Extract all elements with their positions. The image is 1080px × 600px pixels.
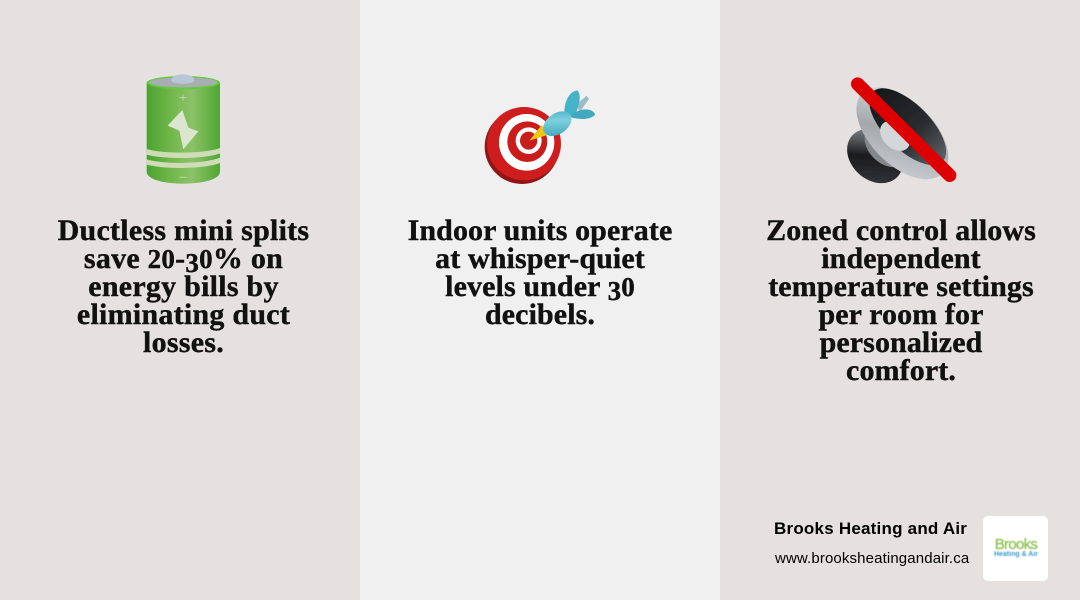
text: zoned control: independent — [821, 242, 981, 275]
text: zoned control: personalized — [820, 326, 982, 359]
text: energy savings: energy bills by — [88, 270, 279, 303]
text: energy savings: Ductless mini splits — [58, 214, 309, 247]
icon: green battery — [147, 74, 220, 184]
icon: dartboard with dart — [485, 90, 595, 184]
text: energy savings: save 20-30% on — [84, 242, 283, 278]
text: quiet operation: decibels. — [485, 298, 595, 331]
panel: quiet operation — [360, 0, 720, 600]
text: zoned control: Zoned control allows — [766, 214, 1036, 247]
website url: www.brooksheatingandair.ca — [775, 550, 969, 567]
icon: crossed-out speaker — [836, 71, 965, 196]
logo wordmark: Brooks — [995, 536, 1037, 553]
text: energy savings: eliminating duct — [77, 298, 290, 331]
text: zoned control — [766, 214, 1036, 387]
text: quiet operation: Indoor units operate — [408, 214, 672, 247]
text: quiet operation — [408, 214, 672, 331]
brand name: Brooks Heating and Air — [774, 519, 967, 538]
logo tagline: Heating & Air — [994, 551, 1038, 558]
text: zoned control: comfort. — [846, 354, 956, 387]
text: zoned control: per room for — [818, 298, 984, 331]
logo card — [983, 516, 1048, 581]
panel: energy savings — [0, 0, 360, 600]
text: quiet operation: levels under 30 — [445, 270, 635, 306]
text: energy savings: losses. — [143, 326, 224, 359]
text: zoned control: temperature settings — [768, 270, 1034, 303]
text: energy savings — [58, 214, 309, 359]
panel: zoned control — [720, 0, 1080, 600]
text: quiet operation: at whisper-quiet — [435, 242, 645, 275]
